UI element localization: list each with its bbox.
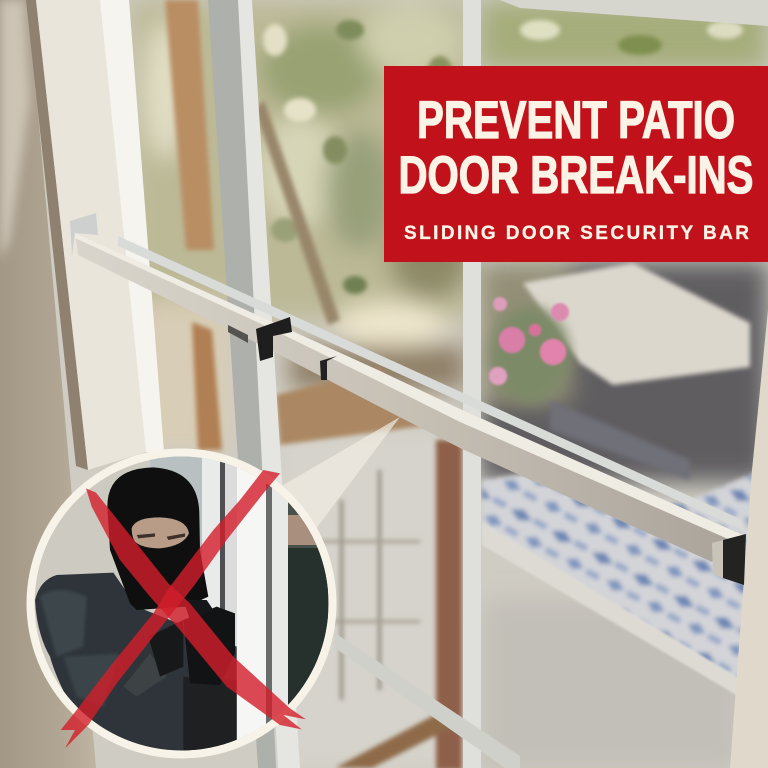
low planter shadow	[550, 400, 690, 480]
callout pointer	[278, 417, 400, 530]
bar maker label	[228, 325, 248, 343]
security bar	[70, 213, 746, 585]
wooden posts	[165, 0, 462, 768]
inset: burglar circle	[26, 448, 340, 760]
flowers	[489, 297, 570, 403]
burglar	[35, 467, 237, 760]
cushion	[523, 263, 750, 385]
red banner	[384, 66, 768, 262]
patterned rug	[482, 470, 760, 700]
red X	[61, 470, 306, 748]
bar end cap	[712, 540, 723, 578]
subheading: SLIDING DOOR SECURITY BAR	[404, 223, 749, 244]
window muntin	[118, 236, 745, 531]
foliage dapples	[263, 20, 743, 294]
bar latch	[256, 317, 292, 361]
bar bracket	[70, 213, 98, 256]
